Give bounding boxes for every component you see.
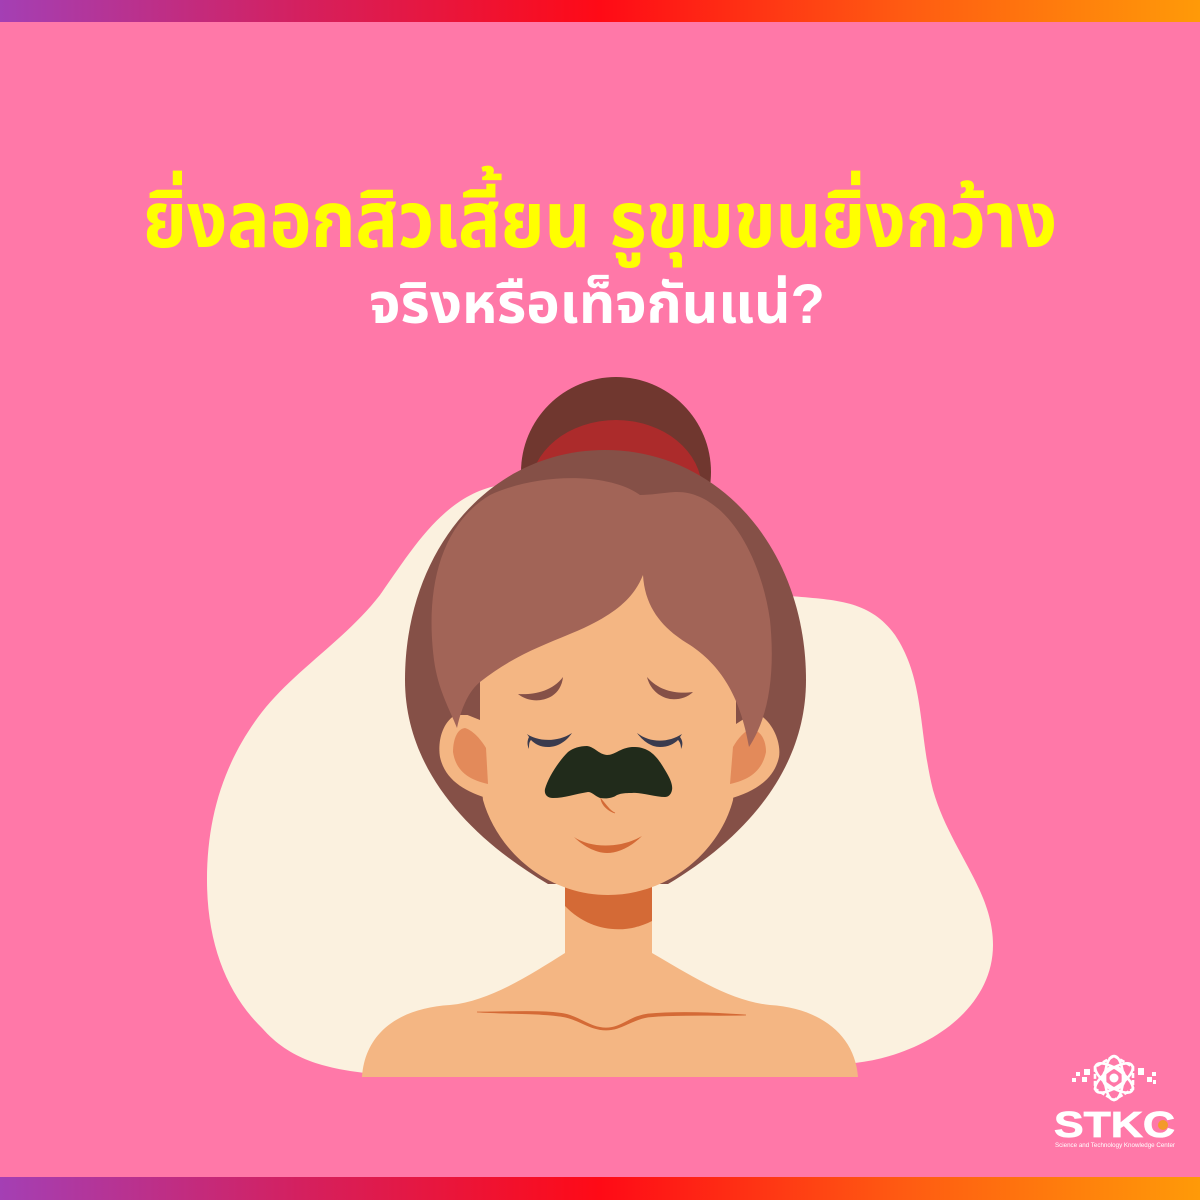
nose line <box>601 799 615 813</box>
hair bun <box>521 377 711 567</box>
right closed eye <box>637 733 682 749</box>
hair shadow at temples <box>460 683 750 724</box>
right ear <box>720 715 779 799</box>
collarbone line <box>477 1012 746 1030</box>
title: ยิ่งลอกสิวเสี้ยน รูขุมขนยิ่งกว้าง <box>143 166 1057 268</box>
left inner ear <box>453 728 488 784</box>
red hair tie <box>530 420 702 560</box>
face <box>480 570 736 895</box>
logo caption: Science and Technology Knowledge Center <box>1055 1143 1175 1149</box>
mouth <box>574 836 642 853</box>
right eyebrow <box>647 677 693 699</box>
cream blob background <box>207 485 993 1073</box>
top gradient bar <box>0 0 1200 22</box>
left ear <box>439 715 500 799</box>
back hair <box>405 450 806 884</box>
left eyebrow <box>518 677 563 700</box>
shoulders and chest <box>362 880 858 1077</box>
hair fringe <box>432 478 772 747</box>
logo orange dot <box>1158 1120 1168 1130</box>
logo data squares <box>1072 1068 1156 1084</box>
STKC logo <box>1054 1056 1175 1149</box>
left closed eye <box>527 733 572 749</box>
nose blemish strip <box>545 746 672 798</box>
logo wordmark: STKC <box>1054 1104 1175 1145</box>
bottom gradient bar <box>0 1177 1200 1200</box>
right inner ear <box>730 729 766 784</box>
neck shadow <box>565 885 652 929</box>
atom icon <box>1091 1056 1137 1100</box>
woman illustration <box>362 377 858 1077</box>
subtitle: จริงหรือเท็จกันแน่? <box>369 272 825 335</box>
